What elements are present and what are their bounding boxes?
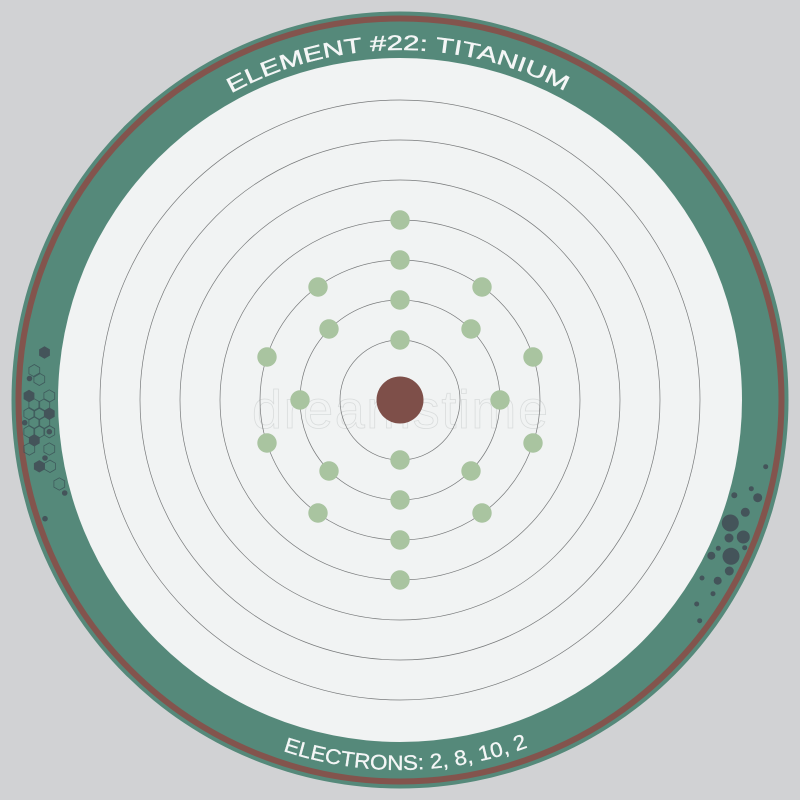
- title: element name: ELEMENT #22: TITANIUM: [226, 35, 570, 93]
- electron orbits: [100, 100, 700, 700]
- decoration: hexagon cluster: [22, 346, 68, 522]
- shell 3: 10 electrons: [257, 250, 543, 550]
- watermark: dreamstime: [252, 380, 548, 440]
- shell 1: 2 electrons: [390, 330, 410, 470]
- electrons: [257, 210, 543, 590]
- shell 4: 2 electrons: [390, 210, 410, 590]
- caption: electron configuration: ELECTRONS: 2, 8, 10, 2: [284, 734, 528, 770]
- inner light disc: [58, 58, 742, 742]
- decoration: dot cluster: [694, 464, 768, 623]
- nucleus: [376, 376, 424, 424]
- shell 2: 8 electrons: [290, 290, 510, 510]
